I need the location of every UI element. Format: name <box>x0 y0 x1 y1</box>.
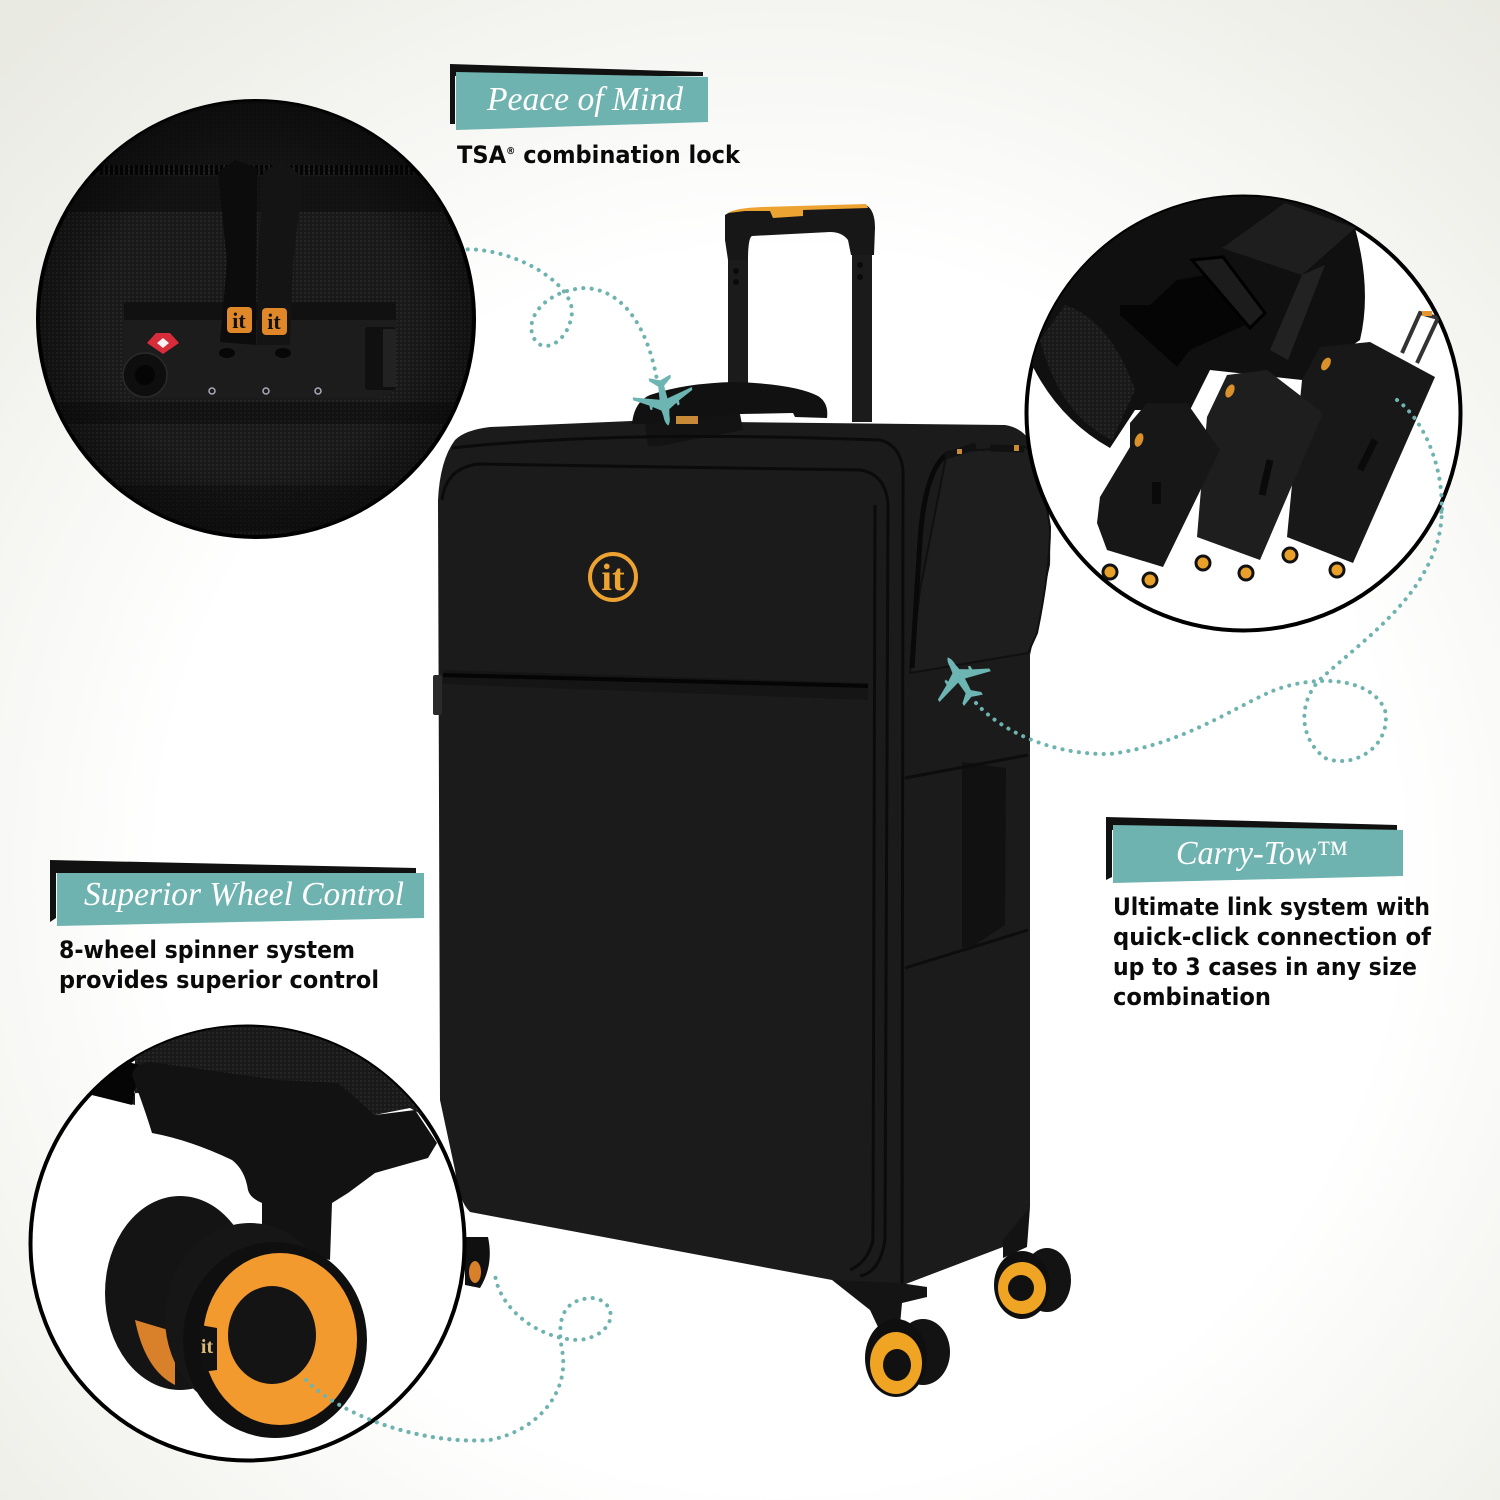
telescoping handle <box>725 204 875 422</box>
icon: plane lock <box>630 371 698 431</box>
panel: wheel close-up <box>30 1025 464 1460</box>
top carry handle <box>632 382 827 424</box>
case bottom <box>92 1026 422 1115</box>
dotted path: lock <box>358 249 657 380</box>
panel: wheel close-up: it <box>201 1336 213 1358</box>
dotted path: carry-tow start <box>1397 400 1442 515</box>
text: Carry-Tow description: quick-click connection of <box>1113 923 1432 951</box>
front panel seams <box>442 464 888 1276</box>
heading: Carry-Tow: Carry-Tow™ <box>1176 835 1348 872</box>
text: TSA lock: combination lock <box>515 141 741 169</box>
panel: lock close-up: it <box>232 308 246 333</box>
right caster <box>994 1207 1071 1319</box>
side grip <box>962 762 1006 948</box>
zipper pulls <box>218 160 257 345</box>
panel: carry-tow close-up <box>1020 190 1460 630</box>
text: wheel description: provides superior control <box>59 966 379 994</box>
keyhole <box>123 353 167 397</box>
text: Carry-Tow description: combination <box>1113 983 1271 1011</box>
inner wheel <box>105 1196 234 1390</box>
dotted path: carry-tow <box>976 400 1442 761</box>
dotted path: wheel <box>306 1275 611 1441</box>
panel: lock close-up <box>30 100 480 538</box>
case small <box>1097 408 1206 567</box>
suitcase silhouette <box>438 421 1050 1290</box>
dials <box>209 388 215 394</box>
side pocket <box>910 445 1050 673</box>
case middle <box>1197 370 1300 560</box>
icon: plane carry-tow <box>922 642 999 716</box>
case large <box>1287 342 1435 563</box>
front caster <box>832 1280 950 1397</box>
logo: it <box>601 557 625 599</box>
caster arm <box>132 1062 437 1260</box>
text: TSA lock: TSA <box>457 141 509 169</box>
top lock <box>645 414 743 446</box>
outer wheel <box>196 1255 367 1438</box>
suitcase <box>433 204 1071 1397</box>
pocket zipper <box>443 670 868 700</box>
TSA diamond <box>147 333 179 354</box>
wheel back left <box>465 1237 490 1288</box>
heading: Superior Wheel Control <box>50 860 424 926</box>
text: wheel description: 8-wheel spinner system <box>59 936 355 964</box>
heading: Carry-Tow <box>1106 817 1403 883</box>
text: TSA lock: ® <box>506 146 515 157</box>
panel: lock close-up: it <box>267 309 281 334</box>
zipper pulls left <box>433 675 442 715</box>
heading: Peace of Mind <box>450 64 708 130</box>
connected cases close-up <box>1020 190 1365 448</box>
text: Carry-Tow description: Ultimate link system with <box>1113 893 1430 921</box>
heading: Peace of Mind: Peace of Mind <box>486 81 684 118</box>
lock body <box>124 314 397 398</box>
mini wheels <box>1103 548 1344 587</box>
logo <box>590 554 636 600</box>
buckle <box>1120 275 1245 367</box>
text: Carry-Tow description: up to 3 cases in any size <box>1113 953 1417 981</box>
dotted path: wheel start <box>306 1380 490 1441</box>
heading: Superior Wheel Control: Superior Wheel Control <box>84 876 404 913</box>
